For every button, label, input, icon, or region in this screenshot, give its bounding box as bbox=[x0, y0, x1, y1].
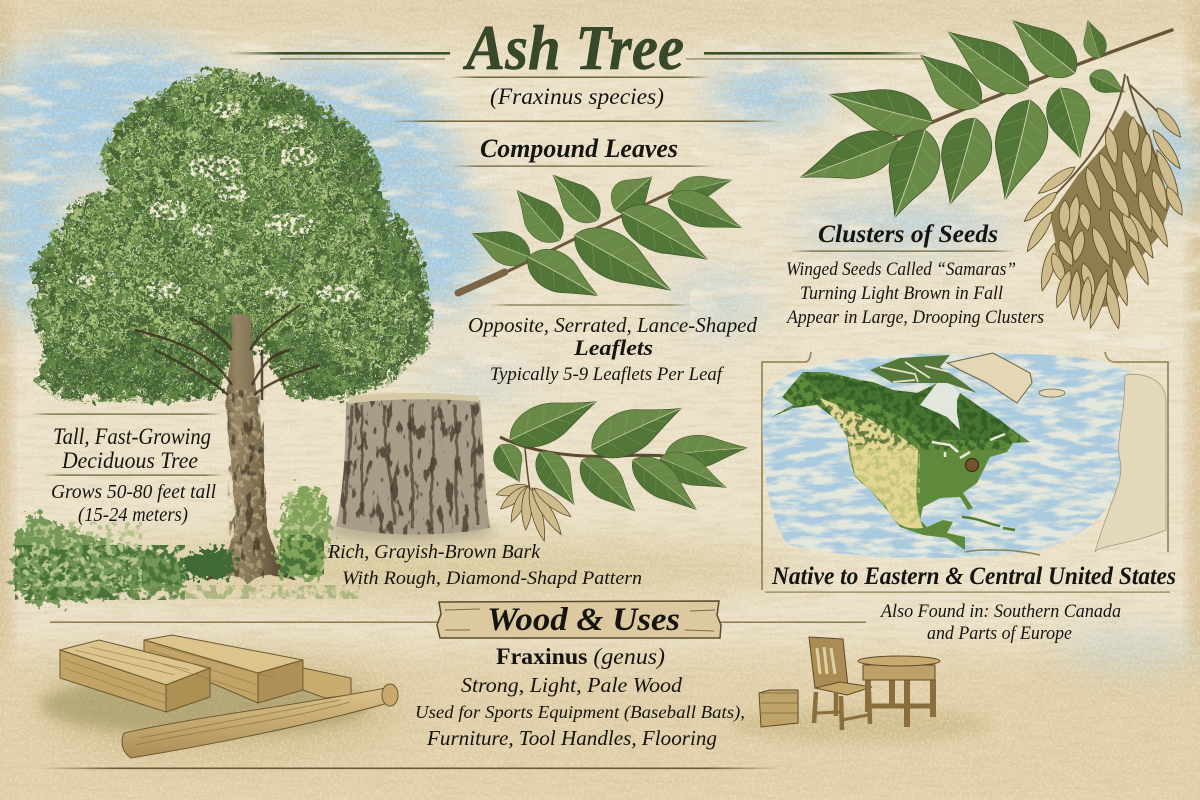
ocean bbox=[762, 354, 1131, 558]
map frame bbox=[762, 352, 1168, 590]
text: tree facts: Tall, Fast-Growing bbox=[53, 424, 211, 449]
map caption: Native to Eastern & Central United States bbox=[771, 563, 1176, 590]
title: Ash Tree bbox=[462, 12, 684, 83]
lumber beams illustration bbox=[40, 635, 370, 735]
sky washes bbox=[0, 30, 1200, 664]
text: clusters of seeds: Appear in Large, Drooping Clusters bbox=[785, 307, 1044, 328]
map marker bbox=[966, 458, 978, 472]
furniture illustration bbox=[759, 637, 940, 730]
text: leaflets bbox=[468, 304, 757, 385]
text: tree facts: Grows 50-80 feet tall bbox=[51, 481, 216, 503]
tree illustration bbox=[12, 60, 440, 603]
scattered blossoms bbox=[20, 60, 440, 405]
text: wood uses: Strong, Light, Pale Wood bbox=[461, 673, 683, 697]
hudson bay bbox=[920, 383, 960, 430]
shrubs bbox=[12, 487, 330, 603]
compound leaf illustration bbox=[458, 163, 749, 312]
iceland bbox=[1039, 389, 1065, 397]
text: clusters of seeds: Winged Seeds Called “Samaras” bbox=[786, 259, 1016, 280]
blossom clusters bbox=[69, 101, 364, 302]
grass bbox=[130, 585, 360, 599]
ground wash bbox=[40, 538, 990, 753]
branches bbox=[135, 305, 320, 400]
great lakes bbox=[932, 434, 1005, 458]
small samara cluster bbox=[495, 481, 574, 542]
wood sign heading bbox=[437, 601, 721, 638]
map panel: Also Found in: Southern Canada bbox=[879, 601, 1121, 622]
text: clusters of seeds bbox=[785, 221, 1044, 328]
seed cluster bbox=[1021, 74, 1187, 330]
text: tree facts: Deciduous Tree bbox=[61, 448, 198, 473]
text: bark bbox=[327, 541, 642, 589]
caribbean bbox=[962, 517, 1015, 530]
subtitle: (Fraxinus species) bbox=[490, 84, 664, 109]
text: tree facts: (15-24 meters) bbox=[78, 504, 188, 526]
text: leaflets: Opposite, Serrated, Lance-Shaped bbox=[468, 313, 757, 337]
text: clusters of seeds: Turning Light Brown in Fall bbox=[800, 283, 1003, 304]
text: wood uses: Furniture, Tool Handles, Flooring bbox=[426, 726, 717, 750]
block bbox=[759, 690, 798, 727]
bark stump illustration bbox=[325, 393, 495, 542]
arctic islands bbox=[870, 355, 977, 393]
wood sign heading: Wood & Uses bbox=[487, 602, 680, 638]
text: bark: Rich, Grayish-Brown Bark bbox=[327, 541, 541, 563]
text: wood uses: Used for Sports Equipment (Baseball Bats), bbox=[415, 702, 745, 723]
text: wood uses: Fraxinus (genus) bbox=[496, 644, 665, 669]
trunk and roots bbox=[135, 305, 320, 585]
branch with seeds illustration bbox=[488, 383, 749, 542]
greenland bbox=[947, 353, 1032, 403]
text: tree facts bbox=[30, 414, 223, 526]
text: clusters of seeds: Clusters of Seeds bbox=[818, 221, 998, 248]
europe and africa coast bbox=[1095, 374, 1166, 552]
section rules bbox=[40, 622, 866, 769]
text: leaflets: Typically 5-9 Leaflets Per Leaf bbox=[490, 364, 725, 385]
text: leaflets: Leaflets bbox=[573, 335, 653, 360]
north america bbox=[765, 350, 1040, 560]
baseball bat illustration bbox=[122, 684, 398, 758]
chair bbox=[809, 637, 872, 730]
map panel bbox=[760, 350, 1176, 644]
heading: compound leaves: Compound Leaves bbox=[480, 134, 678, 163]
table bbox=[858, 656, 940, 727]
text: bark: With Rough, Diamond-Shapd Pattern bbox=[342, 568, 642, 589]
text: wood uses bbox=[415, 644, 745, 750]
canopy bbox=[20, 60, 440, 405]
map panel: and Parts of Europe bbox=[927, 623, 1072, 644]
top right branch with leaves and seeds bbox=[793, 5, 1187, 330]
